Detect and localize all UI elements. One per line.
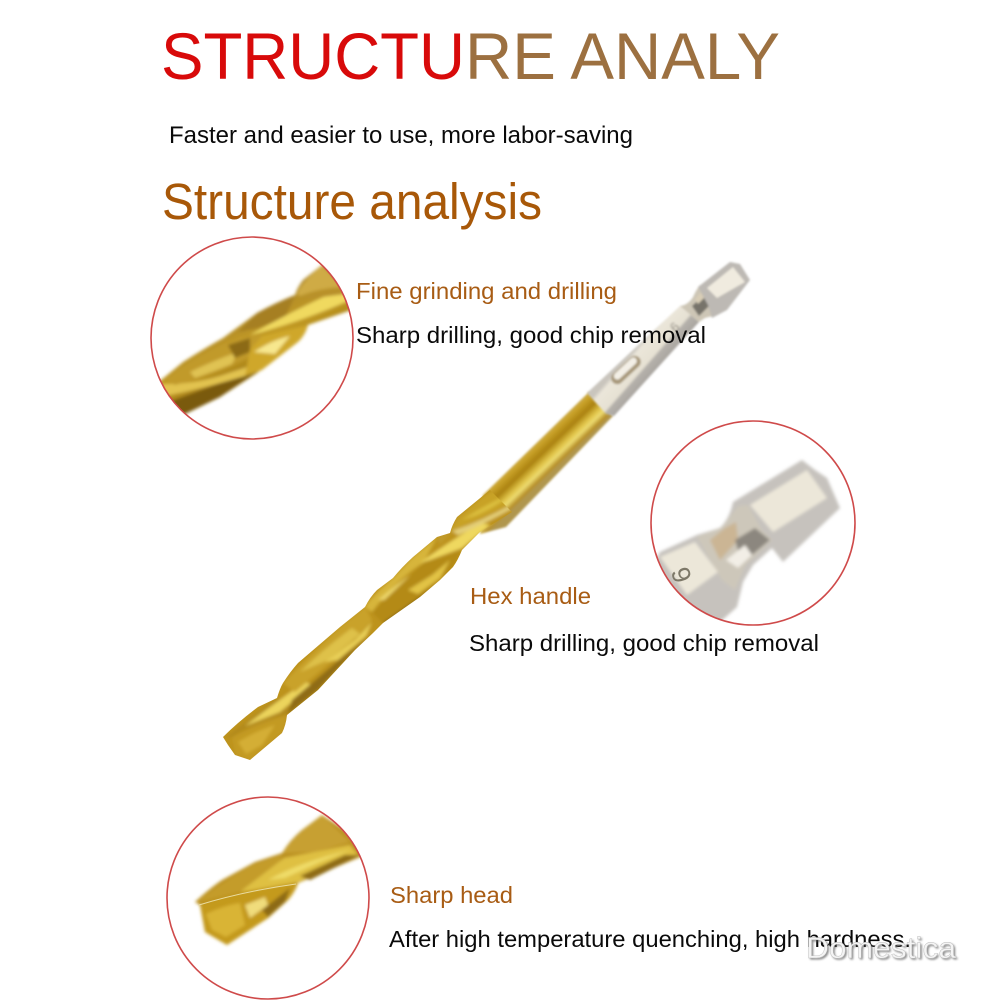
feature 1 text bbox=[356, 278, 706, 348]
circle outline bbox=[151, 237, 353, 439]
slot recess bbox=[609, 353, 643, 387]
feature 2 heading: Hex handle bbox=[470, 583, 591, 609]
infographic canvas bbox=[150, 32, 958, 1000]
middle flute bbox=[365, 537, 437, 612]
feature 1 heading: Fine grinding and drilling bbox=[356, 278, 617, 304]
detail circle: sharp head bbox=[167, 797, 369, 999]
bright flat face bbox=[750, 470, 827, 532]
lower land bbox=[283, 607, 372, 692]
flute shine bbox=[245, 325, 308, 376]
detail circle: hex handle bbox=[650, 421, 855, 640]
circle outline bbox=[651, 421, 855, 625]
section heading: Structure analysis bbox=[162, 173, 542, 230]
top tan wedge bbox=[238, 295, 295, 332]
feature 1 description: Sharp drilling, good chip removal bbox=[356, 322, 706, 348]
watermark: Domestica bbox=[806, 932, 956, 965]
feature 2 description: Sharp drilling, good chip removal bbox=[469, 630, 819, 656]
title: RE ANALY bbox=[465, 20, 780, 93]
neck bbox=[697, 505, 772, 590]
detail circle: flutes bbox=[151, 237, 360, 439]
upper right segment bbox=[282, 815, 350, 853]
upper land bbox=[204, 858, 280, 898]
drill shank bbox=[480, 392, 613, 534]
main bright stripe bbox=[251, 292, 346, 336]
drill flutes bbox=[223, 490, 512, 760]
size marking in circle: 6 bbox=[665, 563, 698, 587]
main drill bit bbox=[200, 392, 613, 770]
upper right segment bbox=[297, 265, 342, 296]
title: STRUCTU bbox=[161, 20, 465, 93]
hex head silhouette bbox=[657, 459, 841, 620]
hex handle bbox=[587, 262, 750, 416]
upper flute bbox=[456, 492, 505, 528]
watermark: Domestica bbox=[808, 934, 958, 966]
lower left bright face bbox=[660, 542, 718, 595]
hex tip bbox=[698, 262, 750, 318]
hex neck bbox=[680, 285, 717, 322]
feature 3 description: After high temperature quenching, high hardness. bbox=[389, 926, 911, 952]
lower bright band bbox=[162, 366, 248, 397]
size marking: 6 bbox=[667, 319, 683, 335]
feature 3 heading: Sharp head bbox=[390, 882, 513, 908]
feature 2 text bbox=[469, 583, 819, 656]
title bbox=[161, 20, 780, 93]
feature 3 text bbox=[389, 882, 911, 952]
subtitle: Faster and easier to use, more labor-saving bbox=[169, 122, 633, 149]
body of land bbox=[168, 338, 251, 378]
lower flute body bbox=[200, 883, 298, 945]
tip flute bbox=[232, 715, 287, 760]
hex collar and body bbox=[587, 306, 699, 416]
dark lower edge bbox=[173, 374, 253, 414]
circle outline bbox=[167, 797, 369, 999]
tip highlight bbox=[199, 884, 296, 905]
